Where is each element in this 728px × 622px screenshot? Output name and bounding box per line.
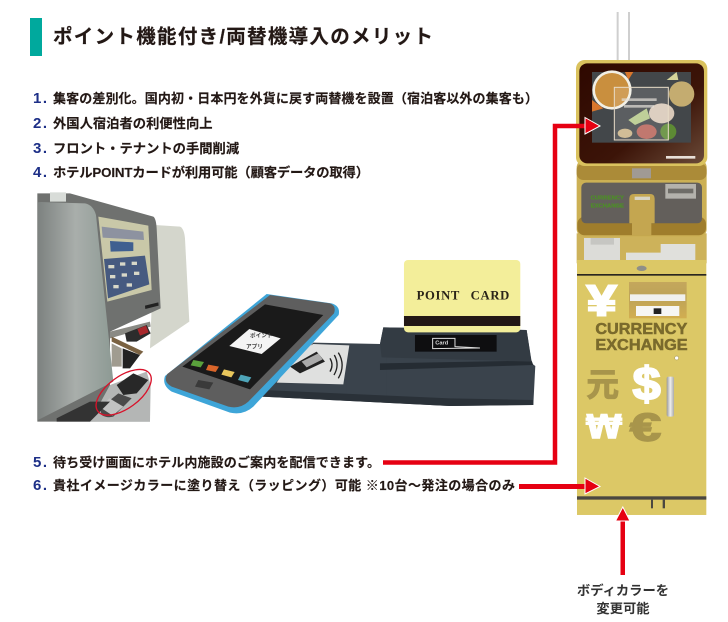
caption: body colour — [577, 582, 669, 616]
smartphone — [164, 294, 339, 413]
yuan symbol: 元 — [586, 366, 619, 403]
currency exchange machine — [576, 12, 707, 515]
list item 4: 4 . — [33, 164, 47, 181]
won symbol: ₩ — [586, 407, 623, 446]
point card: CARD — [471, 288, 509, 302]
card slot — [629, 282, 687, 318]
dollar symbol: $ — [633, 357, 661, 409]
caption: body colour: ボディカラーを — [577, 582, 669, 598]
arrow: item 6 to body — [519, 478, 600, 494]
euro symbol: € — [630, 406, 661, 450]
card reader and smartphone illustration — [164, 260, 535, 413]
touch screen photo — [592, 70, 694, 143]
machine upper section: CURRENCY — [591, 195, 624, 201]
arrow: item 5 to screen — [383, 118, 600, 462]
door handle — [667, 377, 674, 417]
machine label: EXCHANGE — [595, 337, 688, 354]
kiosk photo — [37, 192, 189, 424]
base line — [577, 496, 706, 508]
point card — [404, 260, 520, 332]
point card: POINT — [417, 288, 460, 302]
list item 1: 1 . — [33, 90, 47, 107]
list item 5: 5 . — [33, 454, 47, 471]
list item 3: フロント・テナントの手間削減 — [53, 140, 240, 156]
card reader — [262, 327, 535, 406]
list item 2: 2 . — [33, 115, 47, 132]
card reader: Card — [435, 340, 449, 346]
yen symbol: ¥ — [587, 278, 617, 326]
list item 5: 待ち受け画面にホテル内施設のご案内を配信できます。 — [53, 455, 380, 470]
caption: body colour: 変更可能 — [596, 600, 650, 616]
list item 2: 外国人宿泊者の利便性向上 — [53, 115, 213, 131]
smartphone: ポイント — [250, 332, 273, 340]
list item 1: 集客の差別化。国内初・日本円を外貨に戻す両替機を設置（宿泊客以外の集客も） — [53, 91, 538, 106]
arrow: caption up to body — [616, 507, 630, 575]
list item 6: 貴社イメージカラーに塗り替え（ラッピング）可能 ※10台～発注の場合のみ — [53, 478, 515, 493]
list item 4: ホテルPOINTカードが利用可能（顧客データの取得） — [53, 164, 369, 180]
machine upper section — [576, 12, 707, 263]
title: ポイント機能付き/両替機導入のメリット — [53, 25, 433, 48]
heading accent bar — [30, 18, 42, 56]
machine lower body — [577, 260, 706, 515]
list item 3: 3 . — [33, 140, 47, 157]
machine label — [595, 321, 688, 354]
list item 6: 6 . — [33, 477, 47, 494]
machine upper section: EXCHANGE — [591, 203, 624, 209]
machine label: CURRENCY — [595, 321, 687, 338]
smartphone: アプリ — [246, 344, 263, 351]
